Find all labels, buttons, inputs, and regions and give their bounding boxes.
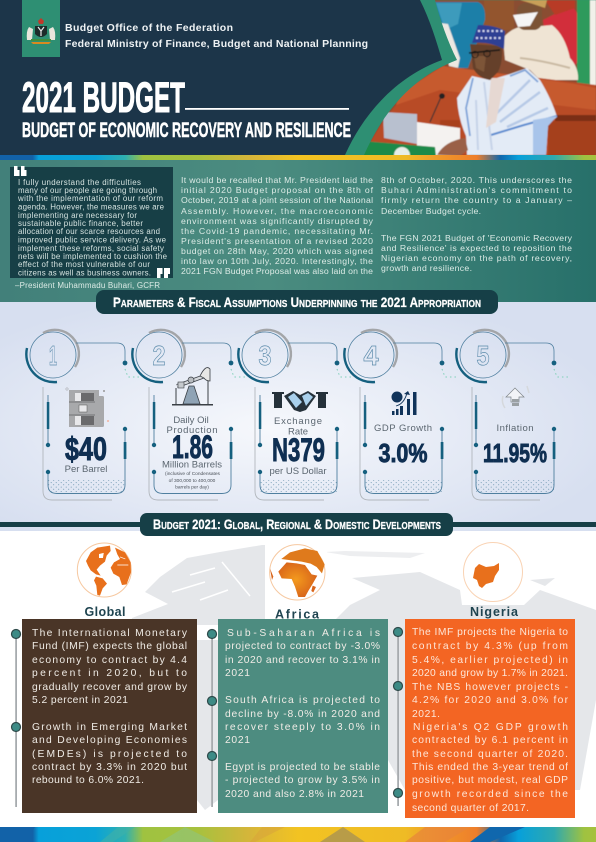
blue chairs — [434, 2, 485, 68]
president's head — [470, 44, 502, 80]
icon: Nigeria map — [464, 542, 522, 602]
text: global: rebound to 6.0% 2021. — [32, 775, 144, 786]
white patches behind globes — [265, 543, 327, 605]
text: Nigeria: This ended the 3-year trend of — [412, 762, 568, 773]
organisation names: Federal Ministry of Finance, Budget and National Planning — [65, 38, 368, 50]
intro text column 2 — [381, 175, 573, 273]
quote box: many of our people are going through — [18, 186, 157, 195]
parameters heading — [96, 290, 498, 314]
value: 3.0%: 3.0% — [378, 438, 428, 468]
label: daily oil production: Production — [166, 425, 218, 436]
icon: oil pumpjack — [172, 368, 213, 406]
papers — [417, 122, 460, 156]
intro text column 2: Nigerian economy on the path of recovery, — [381, 253, 572, 263]
text: global: Fund (IMF) expects the global — [32, 641, 187, 652]
text: global: contract by 3.3% in 2020 but — [32, 762, 187, 773]
text: Nigeria: contract by 4.3% (up from — [412, 641, 568, 652]
quote box: improved public service delivery. As we — [18, 236, 167, 244]
text: global: Growth in Emerging Market — [32, 722, 187, 733]
flag — [577, 0, 590, 85]
label: daily oil production: Daily Oil — [173, 415, 209, 426]
organisation names: Budget Office of the Federation — [65, 22, 233, 34]
intro text column 2: firmly return the country to a January – — [381, 195, 572, 205]
intro text column 1: environment was significantly disrupted by — [181, 216, 374, 226]
intro text column 2: The FGN 2021 Budget of 'Economic Recovery — [381, 233, 573, 243]
heading: Africa: Africa — [275, 608, 320, 622]
note: condensates: of 300,000 to 400,000 — [169, 478, 216, 484]
timeline: Africa — [208, 630, 216, 807]
icon: growth bars — [392, 391, 416, 415]
text: global: gradually recover and grow by — [32, 682, 188, 693]
intro text column 1: Assembly. However, the macroeconomic — [181, 206, 374, 216]
intro panel — [0, 160, 596, 302]
intro text column 2: and Resilience' is expected to reposition the — [381, 243, 572, 253]
label: GDP growth: GDP Growth — [374, 423, 432, 434]
text: global: The International Monetary — [32, 628, 188, 639]
text: Nigeria — [412, 627, 569, 814]
opening quote mark — [14, 166, 26, 176]
president's cap — [472, 25, 505, 49]
quote box — [10, 166, 173, 278]
closing quote mark — [157, 268, 170, 278]
card 5: inflation: 5 — [476, 340, 490, 371]
president's hand — [437, 138, 468, 156]
quote box: implementing are necessary for — [18, 211, 137, 220]
title: 2021 BUDGET — [22, 74, 185, 122]
intro text column 1: initial 2020 Budget proposal on the 8th of — [181, 185, 374, 195]
value: N379: N379 — [272, 432, 325, 468]
quote box: effect of the most vulnerable of our — [18, 260, 150, 269]
text: global: (EMDEs) is projected to — [32, 749, 187, 760]
second heading with divider — [0, 513, 596, 536]
microphone — [430, 97, 441, 122]
label: exchange rate: Exchange — [274, 416, 322, 427]
quote box: sustainable public finance, better — [18, 219, 143, 228]
text: Africa — [225, 628, 380, 800]
quote box: nets will be implemented to cushion the — [18, 252, 168, 261]
text: Nigeria: The NBS however projects - — [412, 682, 568, 693]
intro text column 1 — [181, 175, 374, 276]
card 4: GDP growth: 4 — [364, 340, 379, 371]
value: $40: $40 — [65, 431, 107, 467]
faint world map — [130, 545, 596, 810]
label: inflation: Inflation — [496, 423, 534, 434]
icon: handshake — [272, 391, 328, 412]
label: exchange rate: Rate — [288, 426, 308, 438]
card 2: daily oil production — [132, 330, 246, 500]
card 3: exchange rate — [238, 330, 352, 500]
text: Nigeria: 2020 and grow by 1.7% in 2021. — [412, 668, 568, 679]
text: global: 5.2 percent in 2021 — [32, 695, 128, 706]
text: Africa: 2021 — [225, 668, 250, 679]
intro text column 1: It would be recalled that Mr. President laid the — [181, 175, 373, 185]
heading: Nigeria: Nigeria — [470, 605, 519, 619]
text: global: and Developing Economies — [32, 735, 187, 746]
label: exchange rate — [274, 416, 322, 438]
intro text column 1: budget on 28th May, 2020 which was signed — [181, 246, 373, 256]
laptop — [383, 112, 417, 144]
icon: inflation arrow — [502, 386, 529, 408]
title: BUDGET OF ECONOMIC RECOVERY AND RESILIENCE — [22, 119, 351, 142]
text: Africa: 2021 — [225, 735, 250, 746]
intro text column 2: Buhari Administration's commitment to — [381, 185, 572, 195]
text: global: economy to contract by 4.4 — [32, 655, 187, 666]
quote box: agenda. However, the measures we are — [18, 202, 165, 212]
text: global: percent in 2020, but to — [32, 668, 187, 679]
intro text column 2: December Budget cycle. — [381, 206, 481, 216]
quote box: I fully understand the difficulties — [18, 178, 141, 187]
intro text column 1: October, 2019 at a joint session of the National — [181, 195, 373, 205]
president's robe — [457, 68, 557, 155]
header band — [0, 0, 596, 163]
text: Nigeria: 5.4%, earlier projected) in — [412, 655, 568, 666]
note: condensates — [165, 471, 221, 490]
timeline: global — [12, 630, 20, 807]
text: Africa: 2020 and also 2.8% in 2021 — [225, 789, 364, 800]
card 3: exchange rate: 3 — [258, 340, 272, 371]
label: daily oil production — [166, 415, 218, 436]
second official — [503, 25, 578, 80]
value: 11.95%: 11.95% — [483, 438, 547, 468]
top rainbow strip — [0, 155, 596, 160]
intro text column 1: the Covid-19 pandemic, necessitating Mr. — [181, 226, 373, 236]
logo tab with coat of arms — [22, 0, 60, 57]
card 4: GDP growth — [344, 330, 457, 500]
intro text column 2: 8th of October, 2020. This underscores the — [381, 175, 572, 185]
text: Africa: decline by -8.0% in 2020 and — [225, 709, 380, 720]
icon: Africa globe — [270, 545, 325, 600]
icon: global orange globe — [77, 543, 131, 597]
card 1: oil price: 1 — [49, 340, 57, 371]
label: million barrels: Million Barrels — [162, 460, 222, 470]
parameters panel background — [0, 302, 596, 531]
timeline: Nigeria — [394, 628, 402, 806]
card 2: daily oil production: 2 — [152, 340, 166, 371]
text: Africa: in 2020 and recover to 3.1% in — [225, 655, 380, 666]
text: Nigeria: Nigeria's Q2 GDP growth — [413, 722, 568, 733]
text: Nigeria: second quarter of 2017. — [412, 803, 529, 814]
text: Nigeria: the second quarter of 2020. — [412, 749, 568, 760]
parameters heading: Parameters & Fiscal Assumptions Underpinning the 2021 Appropriation — [113, 294, 481, 310]
label: per barrel: Per Barrel — [65, 464, 107, 475]
podium — [364, 141, 437, 155]
text: Africa: projected to contract by -3.0% — [225, 641, 380, 652]
text: Nigeria: contracted by 6.1 percent in — [412, 735, 568, 746]
label: per US dollar: per US Dollar — [269, 466, 327, 477]
intro text column 2: growth and resilience. — [381, 263, 472, 273]
second heading with divider: Budget 2021: Global, Regional & Domestic Developments — [153, 516, 441, 532]
note: condensates: barrels per day) — [175, 484, 209, 490]
quote attribution: –President Muhammadu Buhari, GCFR — [15, 281, 160, 290]
note: condensates: (inclusive of Condensates — [165, 471, 221, 477]
quote box: with the implementation of our reform — [17, 194, 163, 203]
value: 1.86: 1.86 — [172, 429, 213, 465]
card 1: oil price — [26, 330, 140, 500]
desk — [364, 66, 596, 155]
text: Nigeria: positive, but modest, real GDP — [412, 775, 568, 786]
quote box: allocation of our scarce resources and — [18, 227, 160, 236]
green curved frame — [345, 0, 596, 155]
red chair — [542, 8, 578, 66]
intro text column 1: into law on 10th July, 2020. Interestingly, the — [181, 256, 373, 266]
organisation names — [65, 22, 368, 50]
text: Africa: Egypt is projected to be stable — [225, 762, 380, 773]
text: Nigeria: 4.2% for 2020 and 3.0% for — [412, 695, 569, 706]
panel: global — [12, 619, 197, 813]
text: Africa: - projected to grow by 3.5% in — [225, 775, 380, 786]
panel: Africa — [208, 619, 388, 813]
text: Nigeria: The IMF projects the Nigeria to — [412, 627, 568, 638]
text: Nigeria: 2021. — [412, 709, 440, 720]
heading: global: Global — [84, 605, 126, 619]
quote box: citizens as well as business owners. — [18, 268, 151, 278]
intro text column 1: 2021 FGN Budget Proposal was also laid on the — [181, 266, 373, 276]
text: Africa: recover steeply to 3.0% in — [225, 722, 380, 733]
photo: president at the podium — [358, 0, 596, 163]
quote box: implement these reforms, social safety — [18, 244, 164, 253]
icon: oil barrels — [66, 388, 109, 427]
text: Africa: South Africa is projected to — [225, 695, 380, 706]
card 5: inflation — [456, 330, 569, 500]
text: global — [32, 628, 188, 786]
title — [22, 74, 351, 142]
intro text column 1: President's presentation of a revised 2020 — [181, 236, 373, 246]
panel: Nigeria — [394, 619, 575, 818]
text: Nigeria: growth recorded since the — [412, 789, 568, 800]
bottom rainbow strip — [0, 827, 596, 842]
text: Africa: Sub-Saharan Africa is — [227, 628, 380, 639]
